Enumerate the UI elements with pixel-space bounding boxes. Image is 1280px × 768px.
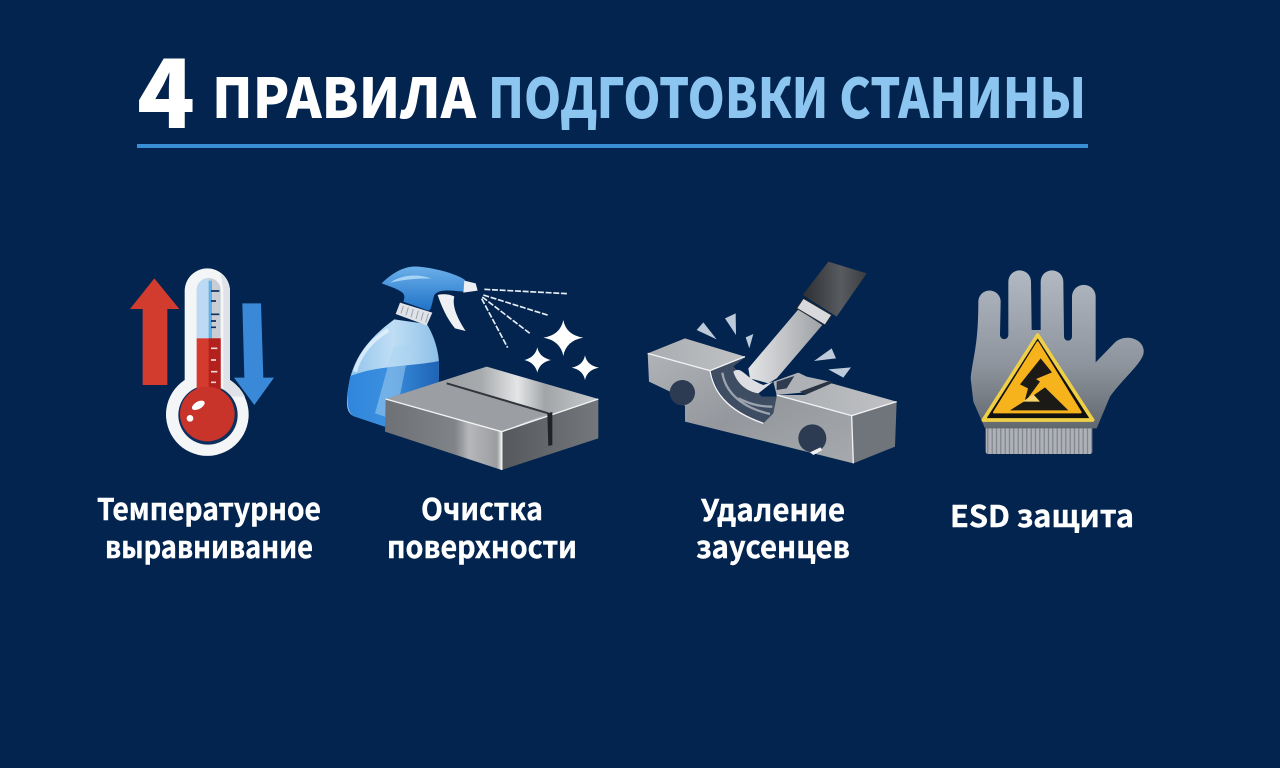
label: temperature equalisation: выравнивание [105, 523, 313, 567]
icon: spray bottle and metal block [347, 266, 599, 470]
spray head [382, 266, 465, 311]
ESD symbol [1010, 358, 1068, 410]
icon: blue down arrow [234, 303, 274, 405]
spray dashes [482, 289, 567, 348]
metal block [385, 367, 598, 470]
tool ferrule [797, 298, 832, 325]
icon: red up arrow [130, 278, 179, 385]
trigger [438, 294, 466, 331]
title white part: ПРАВИЛА [212, 54, 477, 134]
tool shaft [733, 309, 822, 393]
title [137, 17, 1086, 156]
icon: ESD glove with warning triangle [971, 270, 1144, 454]
bottle body [347, 319, 439, 427]
metal shards [697, 313, 851, 378]
label: temperature equalisation [97, 485, 321, 567]
title numeral: 4 [137, 17, 195, 156]
label: ESD protection: ESD защита [950, 492, 1134, 536]
nozzle [463, 281, 478, 293]
icon: thermometer with arrows [130, 268, 274, 456]
label: burr removal: заусенцев [696, 523, 850, 567]
title blue part: ПОДГОТОВКИ СТАНИНЫ [488, 54, 1086, 134]
icon: sparkles [524, 320, 599, 380]
bottle collar [396, 303, 432, 325]
block [648, 338, 897, 463]
label: surface cleaning: поверхности [387, 523, 577, 567]
label: burr removal: Удаление [701, 486, 845, 530]
thermometer body [166, 268, 249, 456]
glove hand [971, 270, 1144, 428]
icon: deburring tool on metal block [648, 262, 897, 463]
label: surface cleaning [387, 485, 577, 567]
label: burr removal [696, 486, 850, 567]
warning triangle [983, 335, 1093, 420]
tool handle [803, 262, 867, 317]
holes [670, 380, 826, 455]
label: surface cleaning: Очистка [421, 485, 543, 529]
label: temperature equalisation: Температурное [97, 485, 321, 529]
cuff [986, 427, 1092, 454]
